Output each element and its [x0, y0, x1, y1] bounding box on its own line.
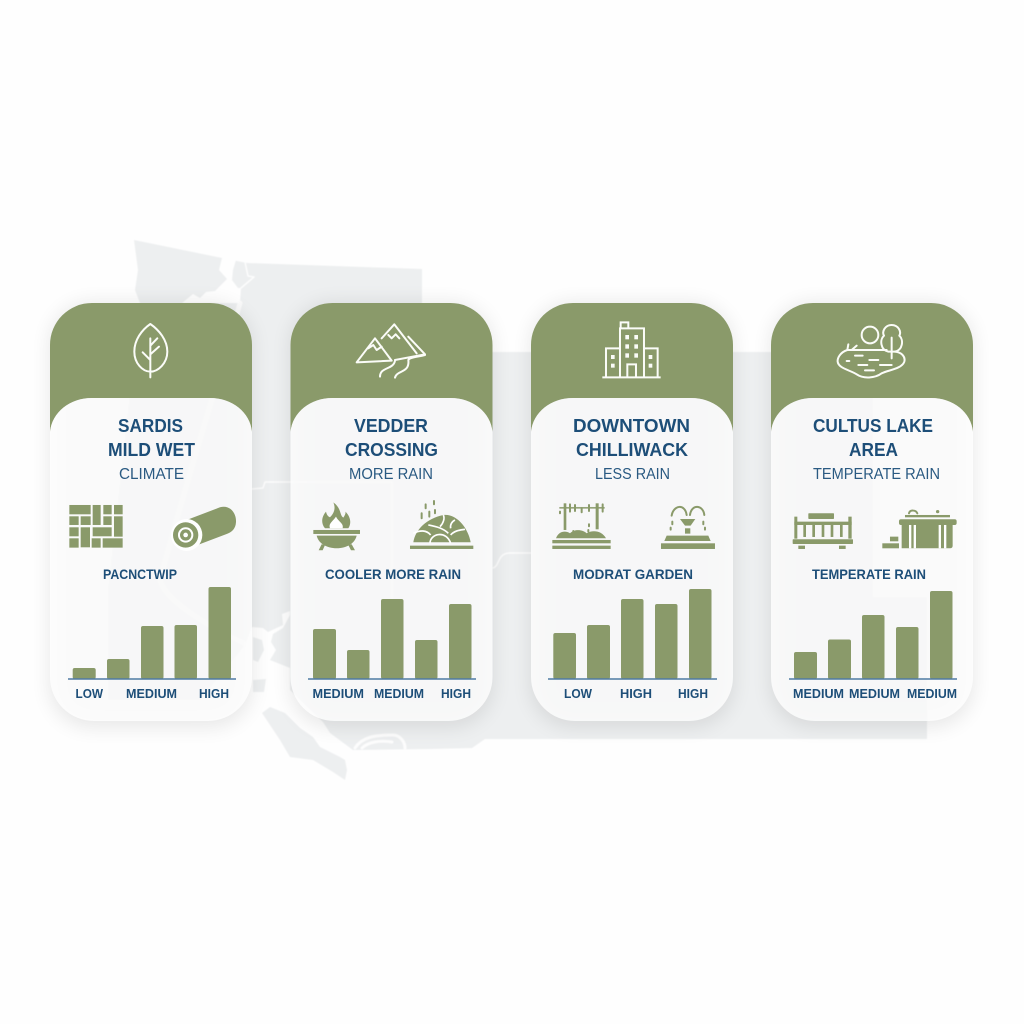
icon: fountain	[661, 507, 715, 549]
panel: Sardis	[50, 303, 252, 727]
heading: Sardis: SARDIS	[118, 416, 183, 436]
subheading: less rain: LESS RAIN	[595, 466, 670, 483]
bar chart: Vedder Crossing: HIGH	[441, 686, 471, 701]
bar chart: Cultus Lake Area: MEDIUM	[849, 686, 900, 701]
background map silhouette	[108, 240, 927, 780]
bar chart: Sardis	[68, 587, 236, 701]
panel: Cultus Lake Area	[771, 303, 973, 727]
bar chart: Sardis: LOW	[76, 686, 104, 701]
panel: Vedder Crossing	[290, 303, 493, 727]
label: cooler more rain: COOLER MORE RAIN	[325, 566, 461, 582]
icon: log roll	[171, 507, 236, 551]
icon: city buildings	[602, 322, 661, 377]
panel: Downtown Chilliwack	[531, 303, 733, 727]
bar chart: Vedder Crossing	[308, 599, 476, 701]
heading: Cultus Lake: CULTUS LAKE	[813, 416, 933, 436]
label: sub-heading: PACNCTWIP	[103, 566, 177, 582]
icon: hot tub with steps	[882, 510, 957, 548]
subheading: climate: CLIMATE	[119, 466, 184, 483]
bar chart: Downtown Chilliwack: HIGH	[678, 686, 708, 701]
bar chart: Cultus Lake Area	[789, 591, 957, 701]
heading line: crossing: CROSSING	[345, 440, 438, 460]
bar chart: Downtown Chilliwack: HIGH	[620, 686, 652, 701]
bar chart: Sardis: MEDIUM	[126, 686, 177, 701]
subheading: temperate rain: TEMPERATE RAIN	[813, 466, 940, 483]
bar chart: Downtown Chilliwack	[548, 589, 717, 701]
bar chart: Cultus Lake Area: MEDIUM	[793, 686, 844, 701]
label: temperate rain: TEMPERATE RAIN	[812, 566, 926, 582]
subheading: more rain: MORE RAIN	[349, 466, 433, 483]
icon: fire bowl	[313, 502, 360, 550]
icon: mountains and river	[357, 324, 425, 378]
icon: leaf	[134, 324, 167, 377]
label: modrat garden: MODRAT GARDEN	[573, 566, 693, 582]
bar chart: Vedder Crossing: MEDIUM	[374, 686, 424, 701]
icon: lake, sun and tree	[838, 325, 905, 377]
heading line: mild wet: MILD WET	[108, 440, 195, 460]
icon: rock pile	[410, 501, 473, 549]
bar chart: Vedder Crossing: MEDIUM	[312, 686, 364, 701]
heading line: area: AREA	[849, 440, 898, 460]
bar chart: Downtown Chilliwack: LOW	[564, 686, 593, 701]
heading: Downtown: DOWNTOWN	[573, 416, 690, 436]
icon: garden bed	[552, 503, 611, 549]
bar chart: Sardis: HIGH	[199, 686, 229, 701]
icon: crib fence	[793, 513, 853, 549]
heading line: Chilliwack: CHILLIWACK	[576, 440, 688, 460]
heading: Vedder: VEDDER	[354, 416, 428, 436]
icon: paving bricks	[69, 505, 123, 548]
bar chart: Cultus Lake Area: MEDIUM	[907, 686, 957, 701]
